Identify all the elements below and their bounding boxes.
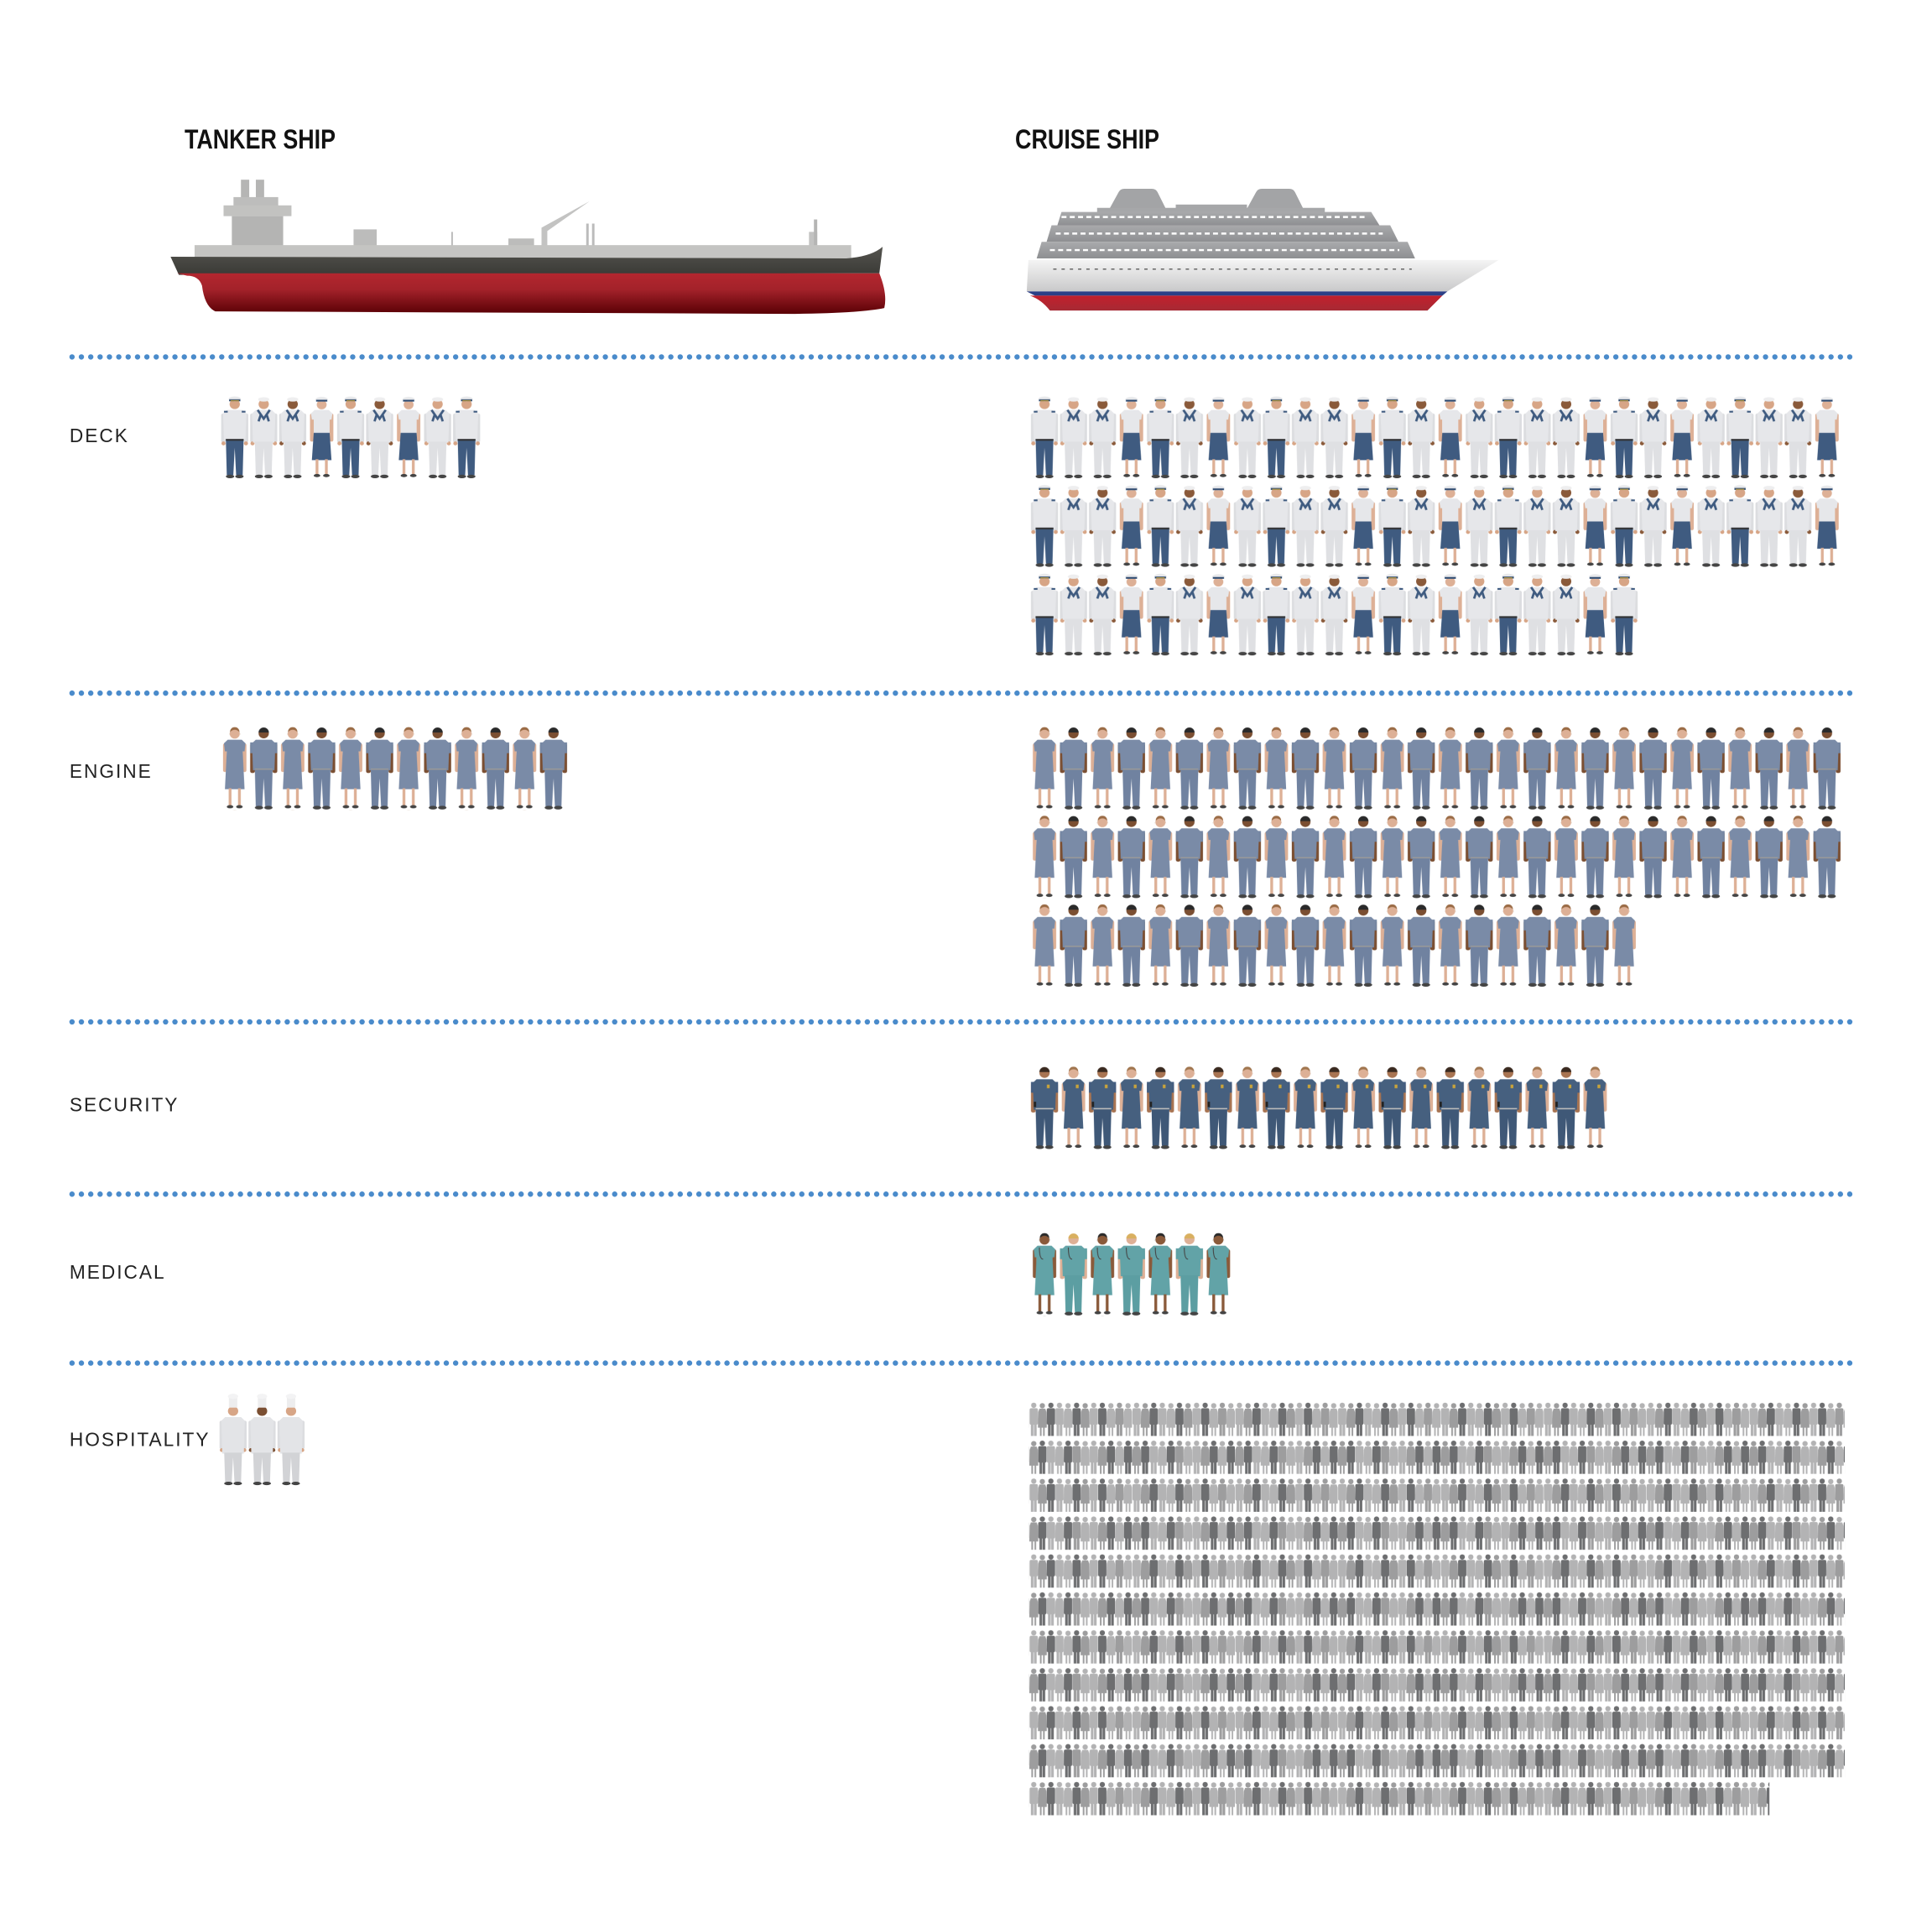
label: security: SECURITY xyxy=(70,1094,179,1116)
cruise hospitality crew (crowd) xyxy=(1029,1399,1845,1816)
main content xyxy=(70,180,1851,1816)
cruise medical crew (7) xyxy=(1030,1233,1233,1316)
label: deck: DECK xyxy=(70,425,129,446)
cruise security crew (20) xyxy=(1030,1066,1610,1149)
illustration: cruise ship xyxy=(1027,189,1498,310)
title: cruise ship: CRUISE SHIP xyxy=(1015,124,1159,154)
tanker deck crew (9) xyxy=(221,396,481,478)
label: medical: MEDICAL xyxy=(70,1261,166,1283)
tanker hospitality chefs (3) xyxy=(220,1394,305,1485)
illustration: tanker ship xyxy=(170,180,885,314)
label: engine: ENGINE xyxy=(70,760,153,782)
label: hospitality: HOSPITALITY xyxy=(70,1428,210,1450)
title: tanker ship: TANKER SHIP xyxy=(185,124,336,154)
cruise engine crew (77) xyxy=(1030,727,1841,988)
tanker engine crew (12) xyxy=(221,727,568,810)
cruise deck crew (77) xyxy=(1030,396,1841,656)
